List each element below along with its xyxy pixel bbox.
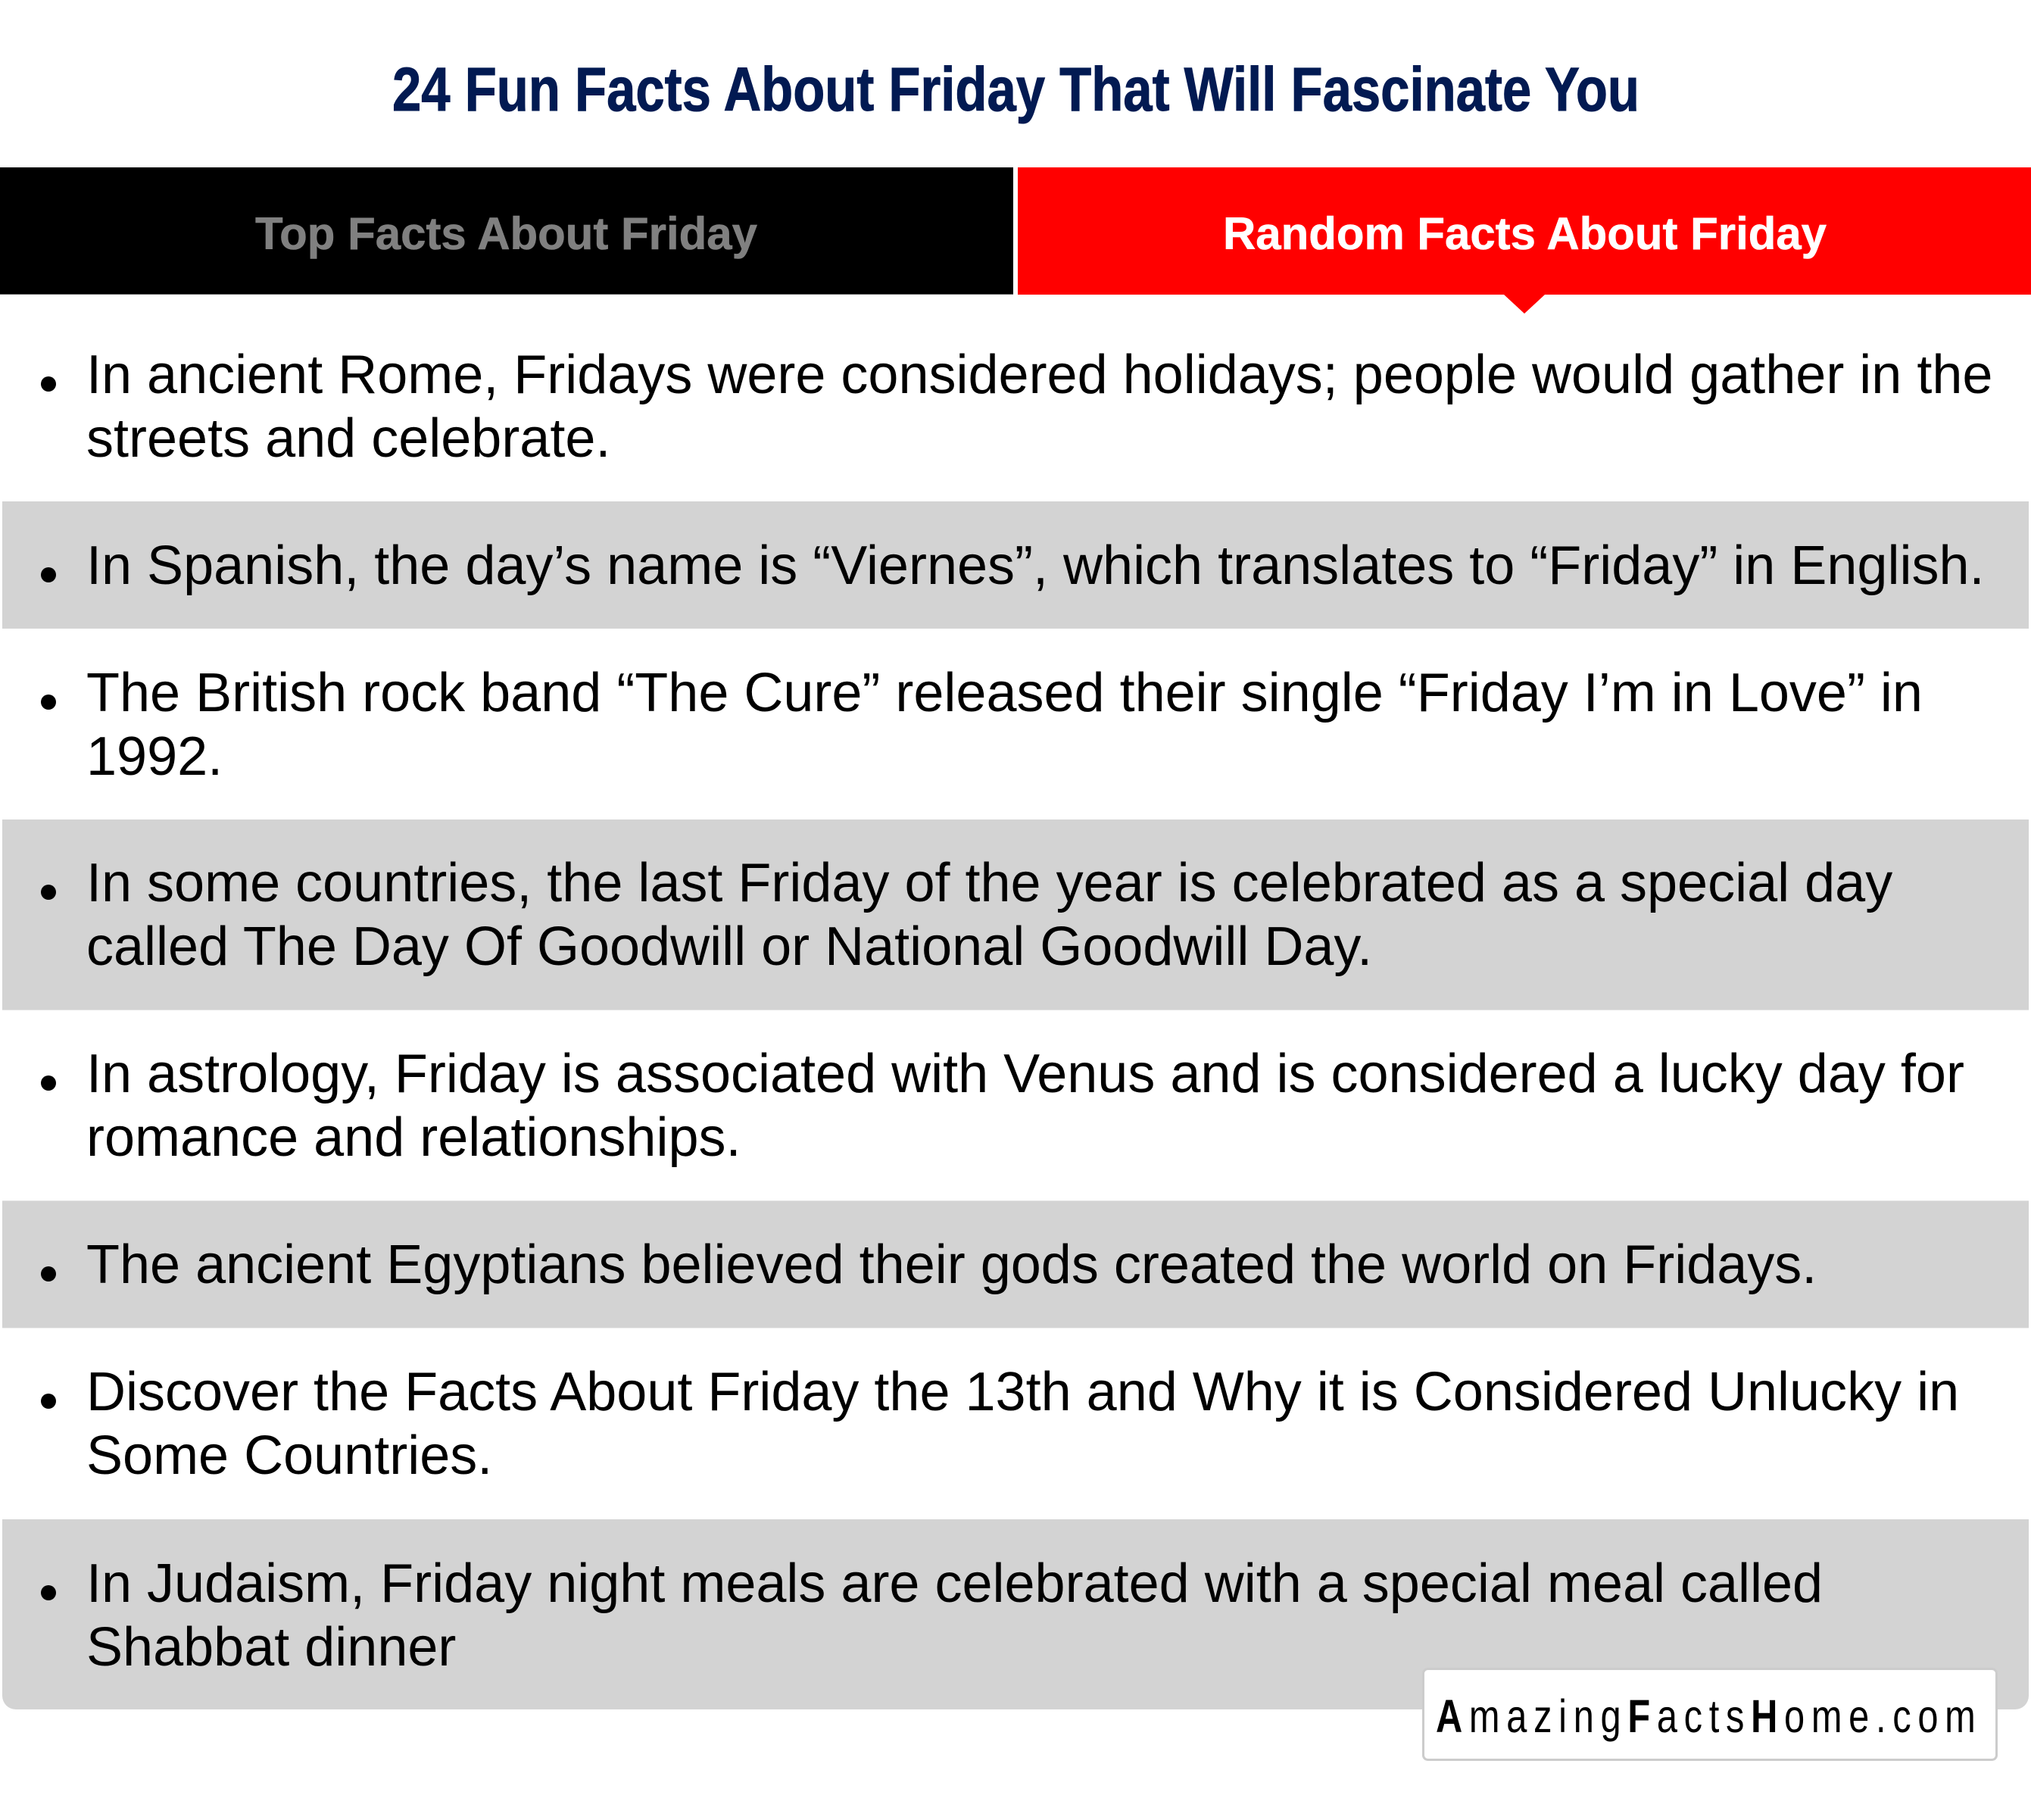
fact 4 row — [2, 819, 2029, 1010]
fact 1 — [41, 345, 1992, 469]
fact 3 — [41, 663, 1923, 787]
fact 1: streets and celebrate. — [86, 408, 610, 469]
title: 24 Fun Facts About Friday That Will Fascinate You — [392, 55, 1639, 124]
fact 8 row — [2, 1519, 2029, 1709]
fact 4 row: In some countries, the last Friday of the year is celebrated as a special day — [86, 853, 1892, 913]
fact 2 row — [2, 501, 2029, 629]
fact 7: Some Countries. — [86, 1425, 492, 1486]
fact 3: The British rock band “The Cure” released their single “Friday I’m in Love” in — [86, 663, 1923, 723]
fact 1: In ancient Rome, Fridays were considered holidays; people would gather in the — [86, 345, 1992, 405]
fact 6 row — [2, 1200, 2029, 1328]
tab: random facts with pointer: Random Facts About Friday — [1223, 208, 1827, 259]
fact 5: romance and relationships. — [86, 1107, 741, 1168]
tab: top facts — [0, 167, 1013, 295]
fact 7: Discover the Facts About Friday the 13th and Why it is Considered Unlucky in — [86, 1362, 1959, 1422]
fact 7 — [41, 1362, 1959, 1486]
fact 6 row: The ancient Egyptians believed their gods created the world on Fridays. — [86, 1235, 1817, 1295]
fact 8 row: Shabbat dinner — [86, 1617, 456, 1678]
tab: random facts with pointer — [1018, 167, 2031, 314]
tab: top facts: Top Facts About Friday — [255, 208, 758, 259]
fact 2 row: In Spanish, the day’s name is “Viernes”, which translates to “Friday” in English. — [86, 535, 1984, 596]
watermark badge — [1424, 1669, 1996, 1760]
fact 3: 1992. — [86, 726, 223, 787]
fact 5 — [41, 1044, 1964, 1168]
fact 5: In astrology, Friday is associated with Venus and is considered a lucky day for — [86, 1044, 1964, 1104]
watermark badge: AmazingFactsHome.com — [1436, 1690, 1976, 1742]
fact 8 row: In Judaism, Friday night meals are celebrated with a special meal called — [86, 1553, 1823, 1614]
fact 4 row: called The Day Of Goodwill or National Goodwill Day. — [86, 916, 1372, 977]
